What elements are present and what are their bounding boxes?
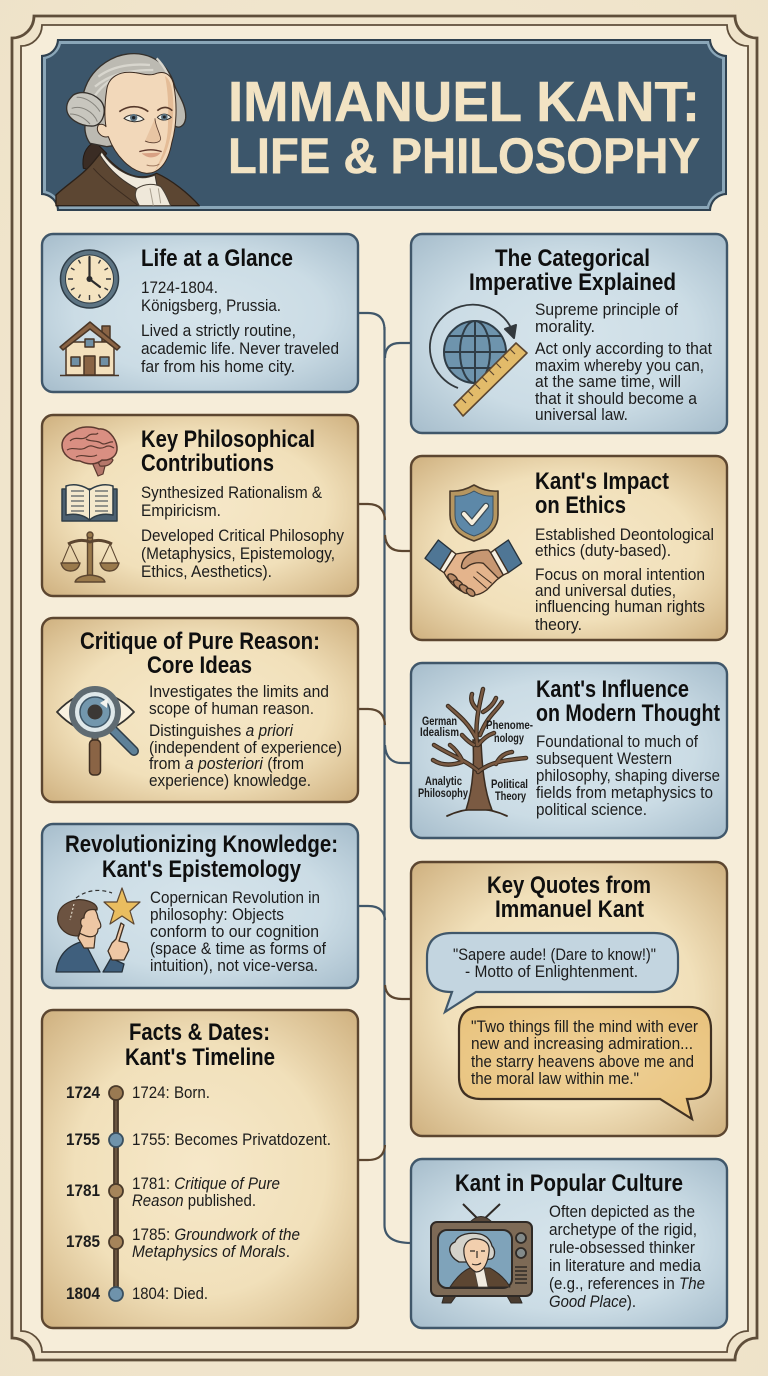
panel: Critique of Pure Reason — [42, 618, 358, 802]
timeline events: Reason published. — [132, 1191, 256, 1210]
body text: Synthesized Rationalism & — [141, 483, 323, 502]
body text: political science. — [536, 800, 647, 819]
body text: Empiricism. — [141, 501, 221, 520]
body text: archetype of the rigid, — [549, 1220, 697, 1239]
timeline years: 1785 — [66, 1232, 100, 1251]
icon: house — [60, 322, 120, 376]
body text — [535, 525, 714, 634]
body text: Often depicted as the — [549, 1202, 695, 1221]
timeline events: 1781: Critique of Pure — [132, 1174, 280, 1193]
body text: that it should become a — [535, 389, 697, 408]
body text: conform to our cognition — [150, 922, 319, 941]
body text: scope of human reason. — [149, 699, 314, 718]
body text: Established Deontological — [535, 525, 714, 544]
body text: maxim whereby you can, — [535, 356, 704, 375]
quote bubble: starry heavens: new and increasing admiration... — [471, 1034, 693, 1053]
body text: rule-obsessed thinker — [549, 1238, 695, 1257]
body text: Investigates the limits and — [149, 682, 329, 701]
icon: brain — [62, 427, 117, 476]
timeline years: 1755 — [66, 1130, 100, 1149]
banner heading — [228, 70, 700, 184]
panel: Key Quotes — [411, 862, 727, 1136]
body text — [150, 888, 326, 975]
heading — [469, 245, 676, 296]
body text — [536, 732, 720, 819]
heading — [535, 468, 669, 519]
heading: Contributions — [141, 450, 274, 477]
body text: morality. — [535, 317, 595, 336]
timeline years: 1724 — [66, 1083, 100, 1102]
quote bubble: starry heavens: the starry heavens above me and — [471, 1052, 694, 1071]
timeline events: Metaphysics of Morals. — [132, 1242, 290, 1261]
panel: Impact on Ethics — [411, 456, 727, 640]
panel: Key Philosophical Contributions — [42, 415, 358, 596]
quote bubble: starry heavens: the moral law within me." — [471, 1069, 639, 1088]
heading: Life at a Glance — [141, 245, 293, 272]
timeline years: 1781 — [66, 1181, 100, 1200]
body text: Foundational to much of — [536, 732, 698, 751]
heading — [487, 872, 651, 923]
heading: on Modern Thought — [536, 700, 720, 727]
timeline years: 1804 — [66, 1284, 100, 1303]
panel: Facts and Dates timeline — [42, 1010, 358, 1328]
timeline events: 1785: Groundwork of the — [132, 1225, 300, 1244]
quote bubble: Sapere aude: - Motto of Enlightenment. — [465, 962, 638, 981]
tree labels: German — [422, 716, 457, 728]
tree labels: Philosophy — [418, 788, 468, 800]
body text: at the same time, will — [535, 372, 681, 391]
heading: Kant's Influence — [536, 676, 689, 703]
body text — [149, 682, 342, 790]
timeline years — [66, 1083, 100, 1303]
panel: Life at a Glance — [42, 234, 358, 392]
body text: in literature and media — [549, 1256, 701, 1275]
body text: intuition), not vice-versa. — [150, 956, 318, 975]
body text: fields from metaphysics to — [536, 783, 713, 802]
title banner — [41, 39, 727, 211]
timeline events — [132, 1083, 331, 1303]
body text: (e.g., references in The — [549, 1274, 705, 1293]
heading: Revolutionizing Knowledge: — [65, 831, 338, 858]
icon: scales of justice — [61, 532, 119, 582]
body text: 1724-1804. — [141, 278, 218, 297]
tree labels: Idealism — [420, 727, 459, 739]
heading — [80, 628, 320, 679]
tree labels: nology — [494, 733, 524, 745]
heading: Core Ideas — [147, 652, 252, 679]
icon: open book — [62, 485, 117, 521]
body text: Ethics, Aesthetics). — [141, 562, 272, 581]
quote bubble: starry heavens: "Two things fill the mind with ever — [471, 1017, 698, 1036]
timeline events: 1724: Born. — [132, 1083, 210, 1102]
panel: Kant in Popular Culture — [411, 1159, 727, 1328]
body text: Lived a strictly routine, — [141, 321, 296, 340]
body text: influencing human rights — [535, 597, 705, 616]
body text: experience) knowledge. — [149, 771, 311, 790]
body text: Focus on moral intention — [535, 565, 705, 584]
body text: philosophy, shaping diverse — [536, 766, 720, 785]
body text: universal law. — [535, 405, 628, 424]
body text: Act only according to that — [535, 339, 712, 358]
body text — [141, 483, 344, 581]
heading — [125, 1019, 275, 1071]
body text: from a posteriori (from — [149, 754, 304, 773]
body text: Copernican Revolution in — [150, 888, 320, 907]
body text: and universal duties, — [535, 581, 676, 600]
heading: Critique of Pure Reason: — [80, 628, 320, 655]
tree labels: Political — [491, 779, 528, 791]
body text: academic life. Never traveled — [141, 339, 339, 358]
body text: far from his home city. — [141, 357, 295, 376]
body text — [535, 300, 712, 424]
banner heading: LIFE & PHILOSOPHY — [228, 128, 700, 184]
panel: Revolutionizing Knowledge — [42, 824, 358, 988]
heading: Immanuel Kant — [495, 896, 644, 923]
heading: Kant's Epistemology — [102, 856, 302, 883]
panel: Categorical Imperative — [411, 234, 727, 433]
heading: Kant in Popular Culture — [455, 1170, 683, 1197]
icon: shield with check — [450, 485, 498, 541]
icon: globe with ruler — [430, 305, 527, 416]
body text: Königsberg, Prussia. — [141, 296, 281, 315]
heading: on Ethics — [535, 492, 626, 519]
connector lines — [358, 313, 411, 1243]
quote bubble: Sapere aude — [427, 933, 678, 1012]
heading: Kant's Timeline — [125, 1044, 275, 1071]
body text: (Metaphysics, Epistemology, — [141, 544, 335, 563]
body text: Good Place). — [549, 1292, 636, 1311]
body text: (independent of experience) — [149, 738, 342, 757]
icon: eye and magnifying glass — [57, 689, 134, 775]
body text: Supreme principle of — [535, 300, 678, 319]
body text — [549, 1202, 705, 1311]
timeline events: 1804: Died. — [132, 1284, 208, 1303]
banner heading: IMMANUEL KANT: — [228, 70, 700, 134]
heading: Kant's Impact — [535, 468, 669, 495]
icon: clock — [60, 250, 118, 308]
icon: handshake — [425, 540, 522, 598]
heading: The Categorical — [495, 245, 650, 272]
body text: philosophy: Objects — [150, 905, 284, 924]
body text: Developed Critical Philosophy — [141, 526, 344, 545]
body text — [141, 278, 339, 376]
panel: Influence on Modern Thought — [411, 663, 727, 838]
timeline events: 1755: Becomes Privatdozent. — [132, 1130, 331, 1149]
body text: ethics (duty-based). — [535, 541, 671, 560]
tree labels — [418, 716, 533, 803]
tree labels: Theory — [495, 791, 526, 803]
body text: Distinguishes a priori — [149, 721, 294, 740]
heading: Imperative Explained — [469, 269, 676, 296]
heading — [536, 676, 720, 727]
icon: tree of influence — [433, 689, 526, 816]
tree labels: Phenome- — [486, 720, 533, 732]
heading: Key Philosophical — [141, 426, 315, 453]
heading — [65, 831, 338, 883]
body text: (space & time as forms of — [150, 939, 326, 958]
quote bubble: starry heavens — [459, 1007, 711, 1119]
icon: portrait of Kant — [56, 54, 199, 206]
heading — [141, 426, 315, 477]
heading: Facts & Dates: — [129, 1019, 270, 1046]
tree labels: Analytic — [425, 776, 462, 788]
icon: person looking at a star — [56, 888, 140, 972]
body text: theory. — [535, 615, 582, 634]
body text: subsequent Western — [536, 749, 672, 768]
quote bubble: Sapere aude: "Sapere aude! (Dare to know!)" — [453, 945, 656, 964]
timeline axis — [109, 1086, 123, 1301]
heading: Key Quotes from — [487, 872, 651, 899]
icon: television with Kant portrait — [431, 1204, 532, 1303]
